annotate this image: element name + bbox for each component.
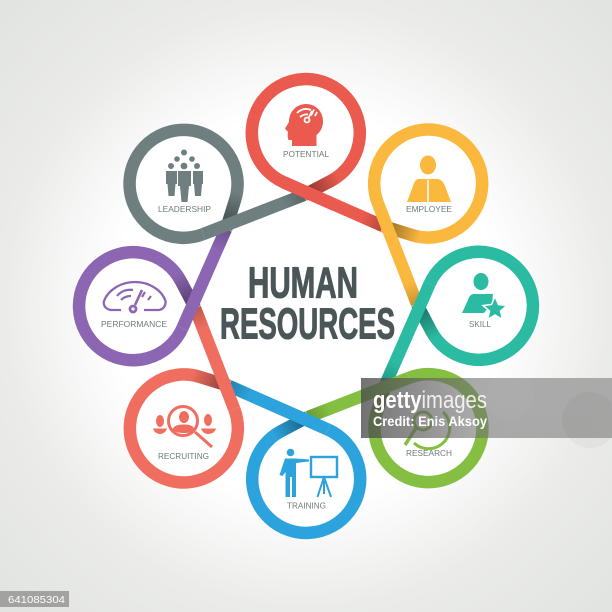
icon: training presenter and board — [280, 449, 337, 497]
ring: research — [308, 324, 505, 521]
icon: leadership group — [166, 150, 203, 202]
ring: leadership — [107, 91, 304, 288]
ring: performance — [79, 229, 226, 360]
potential tail crossing over the leadership tail — [284, 182, 335, 205]
title: RESOURCES — [220, 300, 395, 348]
ring: skill — [386, 252, 533, 383]
label: research: RESEARCH — [406, 448, 452, 458]
icon: employee — [407, 156, 451, 202]
ring: employee — [324, 107, 521, 304]
label: performance: PERFORMANCE — [101, 319, 167, 329]
image id tag — [0, 591, 69, 607]
label: leadership: LEADERSHIP — [158, 204, 211, 214]
ring: training — [229, 386, 360, 533]
watermark logo: gettyimages — [373, 387, 487, 414]
label: recruiting: RECRUITING — [158, 451, 209, 461]
label: employee: EMPLOYEE — [406, 204, 452, 214]
icon: head with gauge — [285, 104, 323, 146]
label: skill: SKILL — [469, 319, 491, 329]
icon: research magnifier — [405, 412, 450, 449]
title: HUMAN — [248, 258, 358, 308]
watermark credit: Credit: Enis Aksoy — [373, 414, 487, 429]
icon: performance gauge — [104, 282, 166, 312]
icon: recruiting magnifier with people — [153, 406, 216, 447]
ring: recruiting — [91, 308, 288, 505]
image id tag: 641085304 — [8, 594, 65, 606]
ring: potential — [252, 79, 383, 226]
icon: skill — [462, 273, 507, 320]
watermark band — [361, 371, 612, 448]
label: potential: POTENTIAL — [283, 149, 329, 159]
label: training: TRAINING — [287, 500, 326, 510]
title — [220, 258, 395, 348]
